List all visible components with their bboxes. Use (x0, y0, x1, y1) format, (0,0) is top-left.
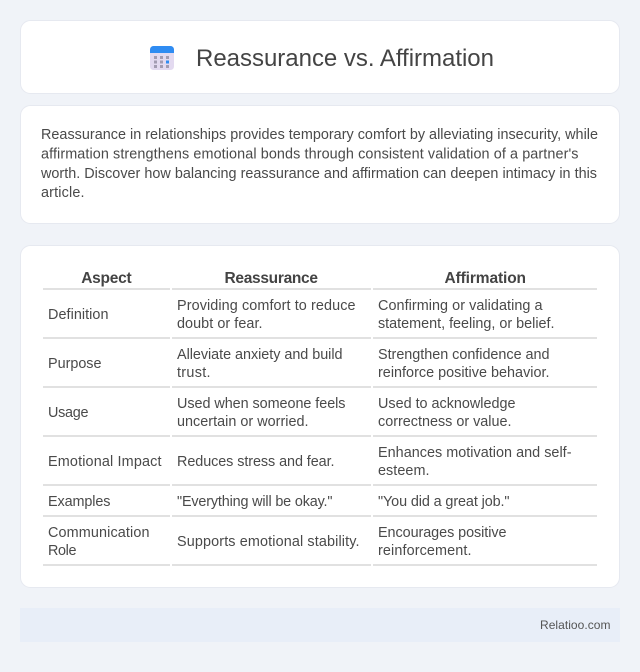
row: Purpose (48, 347, 550, 381)
row: Usage: Usage (48, 405, 88, 421)
panel: comparison table (20, 246, 620, 588)
text block: intro: article. (41, 185, 84, 201)
row: Communication Role: Communication (48, 525, 150, 541)
row: Emotional Impact: esteem. (378, 463, 430, 479)
text block: intro (40, 127, 598, 201)
row: Emotional Impact: Enhances motivation and self- (378, 445, 572, 461)
title: Reassurance vs. Affirmation (196, 45, 494, 72)
row: Definition: Providing comfort to reduce (177, 298, 356, 314)
table header row: Affirmation (444, 270, 526, 287)
row: Emotional Impact: Reduces stress and fear. (177, 454, 334, 470)
row: Purpose: reinforce positive behavior. (378, 365, 550, 381)
table header row (81, 270, 526, 287)
row: Usage: Used when someone feels (177, 396, 346, 412)
text block: intro: affirmation strengthens emotional bonds through consistent validation of a partner's (41, 146, 578, 162)
row: Examples (48, 494, 510, 510)
row: Examples: Examples (48, 494, 110, 510)
row: Emotional Impact: Emotional Impact (48, 454, 162, 470)
row: Communication Role: Encourages positive (378, 525, 506, 541)
table header row: Reassurance (224, 270, 318, 287)
text block: intro: Reassurance in relationships provides temporary comfort by alleviating insecurity, while (41, 127, 598, 143)
row: Definition: statement, feeling, or belief. (378, 316, 554, 332)
row: Usage: Used to acknowledge (378, 396, 516, 412)
text block: intro: worth. Discover how balancing reassurance and affirmation can deepen intimacy in this (40, 166, 597, 182)
row: Communication Role: Supports emotional stability. (177, 534, 360, 550)
row: Purpose: Alleviate anxiety and build (177, 347, 342, 363)
row: Communication Role (48, 525, 506, 559)
row: Communication Role: Role (48, 543, 76, 559)
footer bar (20, 608, 620, 642)
row: Communication Role: reinforcement. (378, 543, 472, 559)
row: Usage: correctness or value. (378, 414, 512, 430)
row: Purpose: trust. (177, 365, 210, 381)
row: Purpose: Strengthen confidence and (378, 347, 550, 363)
panel: intro text (20, 106, 620, 224)
icon: calendar (150, 46, 174, 70)
row: Purpose: Purpose (48, 356, 102, 372)
row: Definition: doubt or fear. (177, 316, 262, 332)
row: Examples: "You did a great job." (378, 494, 510, 510)
row: Usage: uncertain or worried. (177, 414, 308, 430)
footer text: Relatioo.com (540, 618, 610, 632)
table header row: Aspect (81, 270, 132, 287)
row: Definition: Definition (48, 307, 108, 323)
row: Definition (48, 298, 554, 332)
row: Emotional Impact (48, 445, 572, 479)
row: Usage (48, 396, 516, 430)
row: Definition: Confirming or validating a (378, 298, 542, 314)
row: Examples: "Everything will be okay." (177, 494, 332, 510)
panel: title header (20, 20, 620, 94)
